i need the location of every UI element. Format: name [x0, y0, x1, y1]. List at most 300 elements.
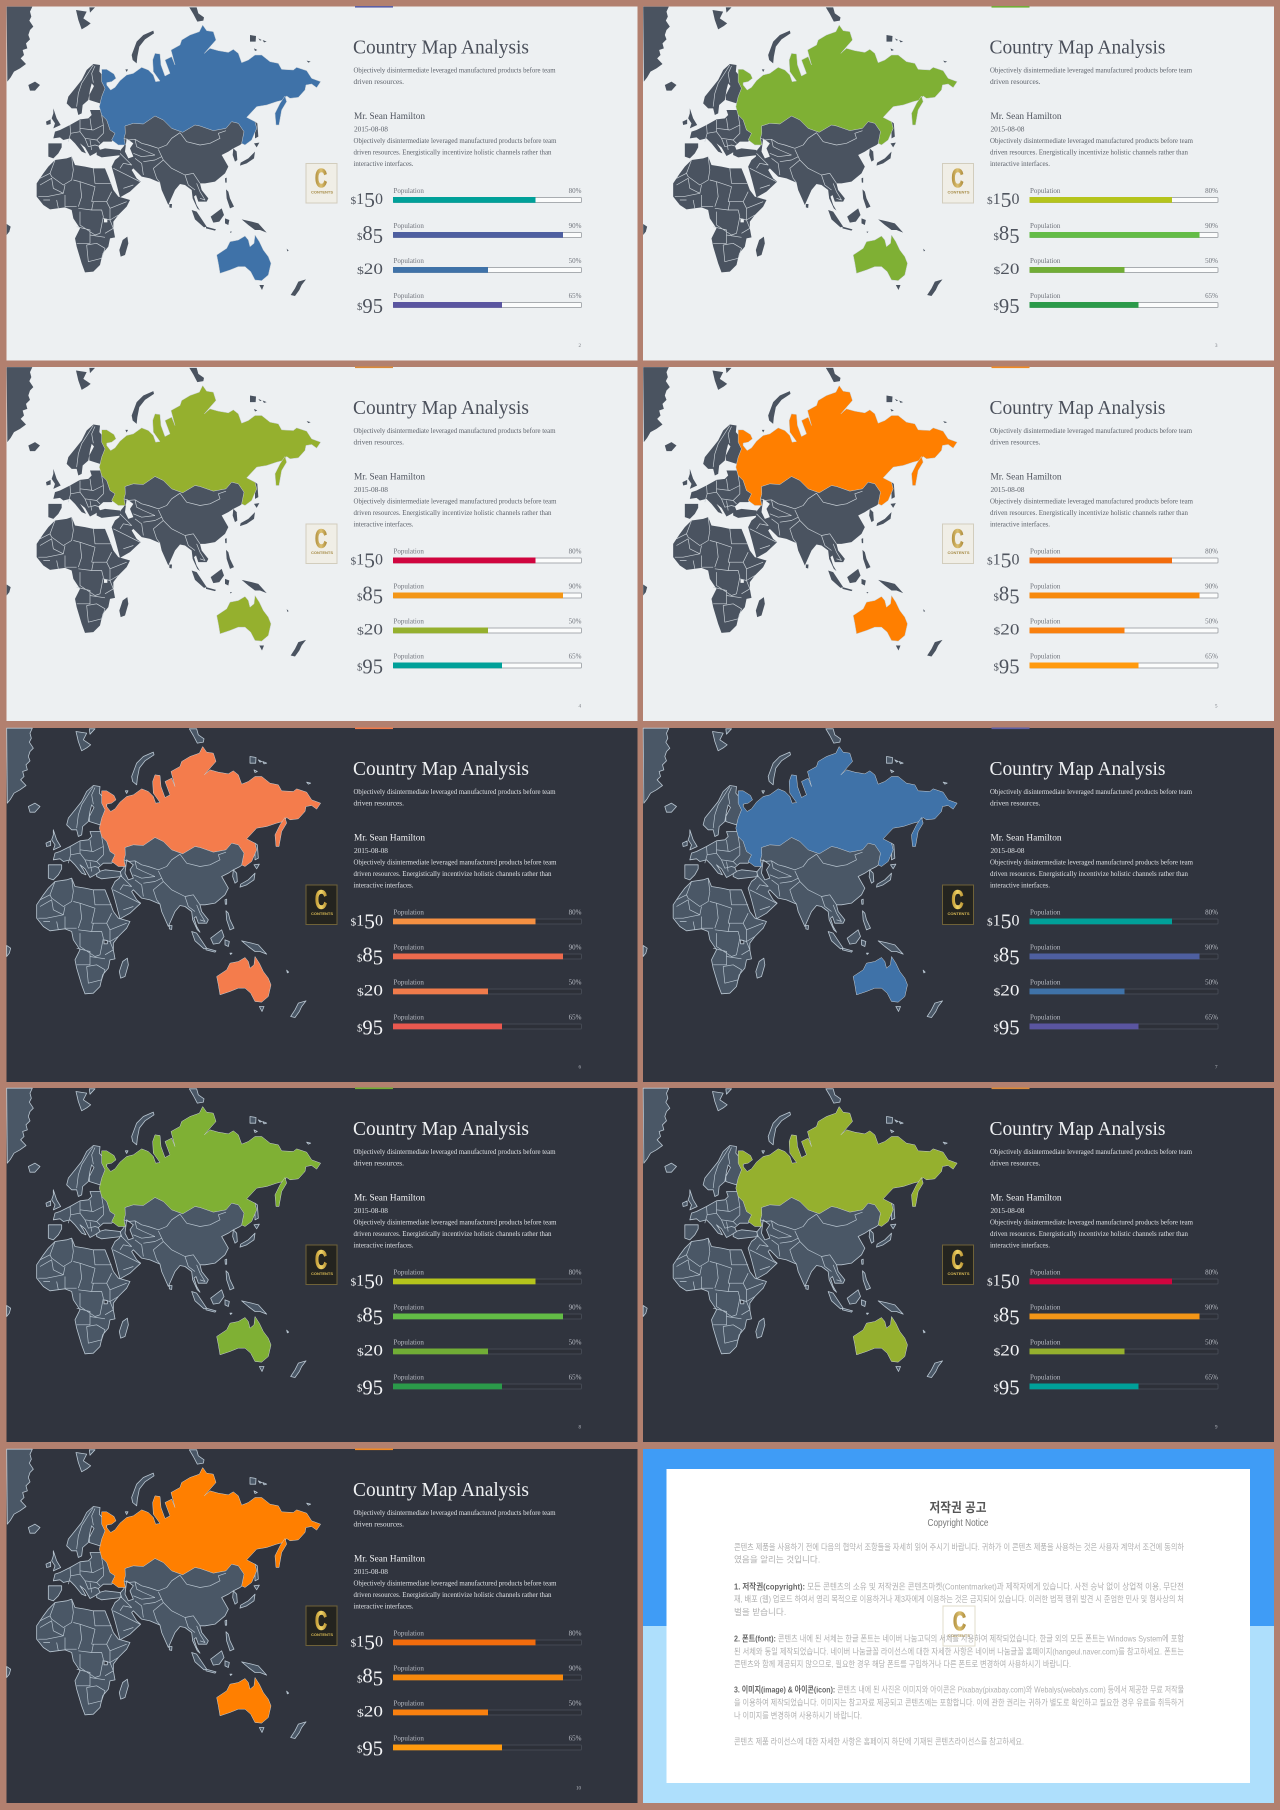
author block: Mr. Sean Hamilton [990, 472, 1062, 482]
stat row 2: $8 [357, 1664, 373, 1688]
author block: 2015-08-08 [354, 124, 388, 134]
logo [306, 1244, 337, 1284]
author block [990, 834, 1193, 890]
author block: interactive interfaces. [990, 880, 1050, 890]
logo: CONTENTS [948, 550, 970, 555]
logo [306, 524, 337, 564]
author block: Objectively disintermediate leveraged manufactured products before team [354, 1218, 557, 1226]
page number: 7 [1215, 1066, 1218, 1070]
copyright clause 2: 콘텐츠와 함께 제공되지 않으므로, 필요한 경우 해당 폰트를 구입하거나 다른 폰트로 변경하여 사용하시기 바랍니다. [734, 1658, 1071, 1669]
stat row 3 [994, 257, 1218, 278]
stat row 2: Population [1030, 1304, 1061, 1312]
author block: interactive interfaces. [354, 1240, 414, 1250]
author block: driven resources. Energistically incentivize holistic channels rather than [354, 1590, 552, 1599]
copyright clause 1: 1. 저작권(copyright): 모든 콘텐츠의 소유 및 저작권은 콘텐츠마켓(Contentmarket)과 제작자에게 있습니다. 사전 승낙 없이 상업적 이용, 무단전 [734, 1580, 1184, 1592]
stat row 3: $20 [994, 982, 1020, 1000]
map [7, 728, 321, 1017]
author block: Mr. Sean Hamilton [354, 1194, 425, 1204]
page number: 10 [576, 1786, 582, 1792]
stat row 4: 65% [1205, 1014, 1218, 1022]
stat row 4 [994, 1374, 1218, 1400]
stat row 4: Population [1030, 292, 1061, 300]
title: Country Map Analysis [353, 1479, 529, 1501]
map [643, 367, 957, 656]
logo [942, 884, 974, 924]
stat row 3 [357, 1338, 582, 1360]
stat row 4: 95 [362, 1016, 383, 1040]
stat row 1: 0 [375, 552, 383, 568]
stat row 3: $20 [357, 622, 383, 638]
stat row 2: 5 [1009, 584, 1020, 608]
stat row 2 [357, 582, 582, 608]
logo: C [315, 1606, 327, 1636]
stat row 4 [357, 1374, 582, 1400]
stat row 4 [357, 1014, 582, 1040]
intro text [990, 787, 1192, 808]
logo: CONTENTS [311, 911, 333, 916]
author block: interactive interfaces. [354, 880, 414, 890]
author block: driven resources. Energistically incentivize holistic channels rather than [990, 148, 1188, 156]
stat row 3: 50% [1205, 978, 1218, 986]
logo: CONTENTS [948, 190, 970, 194]
stat row 1: $1 [350, 1272, 364, 1290]
page number: 6 [578, 1066, 582, 1070]
stat row 2: $8 [994, 942, 1009, 966]
intro text: Objectively disintermediate leveraged manufactured products before team [354, 1147, 556, 1156]
author block: Objectively disintermediate leveraged manufactured products before team [354, 858, 557, 866]
stat row 4: 65% [569, 1014, 582, 1022]
stat row 4 [357, 292, 582, 318]
intro text: driven resources. [354, 77, 404, 86]
stat row 2: 5 [373, 1306, 383, 1330]
stat row 1: 5 [364, 188, 375, 212]
stat row 2: 5 [373, 584, 383, 608]
stat row 2: 5 [1009, 946, 1020, 970]
stat row 2: $8 [357, 1302, 373, 1326]
stat row 1: 80% [1205, 548, 1218, 556]
map [7, 1449, 321, 1738]
stat row 4 [994, 292, 1218, 318]
author block [354, 834, 557, 890]
copyright clause 1 [734, 1580, 1184, 1617]
stat row 3: $20 [357, 1342, 383, 1360]
stat row 4: 95 [362, 1376, 383, 1400]
logo: C [315, 163, 327, 193]
stat row 4: $ [994, 662, 999, 674]
stat row 4: 65% [1205, 652, 1218, 660]
stat row 3 [357, 1700, 582, 1720]
stat row 1: 5 [364, 910, 375, 934]
stat row 2: 90% [1205, 1304, 1218, 1312]
stat row 3: Population [394, 257, 424, 265]
logo: C [952, 884, 964, 914]
logo: CONTENTS [311, 1632, 333, 1637]
stat row 4: 95 [362, 1736, 383, 1760]
stat row 1: Population [394, 1630, 424, 1638]
stat row 4: $ [357, 301, 363, 313]
stat row 1: Population [394, 908, 424, 916]
stat row 4: 95 [999, 654, 1020, 678]
intro text [354, 1147, 556, 1168]
author block: driven resources. Energistically incentivize holistic channels rather than [990, 1229, 1188, 1238]
logo: CONTENTS [311, 1271, 333, 1276]
stat row 2 [994, 942, 1218, 970]
intro text [354, 787, 556, 808]
author block [354, 1554, 557, 1610]
copyright intro: 였음을 알리는 것입니다. [734, 1554, 820, 1564]
stat row 2: Population [1030, 582, 1061, 590]
stat row 3: 50% [569, 257, 582, 265]
intro text [990, 1147, 1192, 1168]
author block: driven resources. Energistically incentivize holistic channels rather than [354, 148, 552, 156]
map [643, 7, 957, 296]
author block: Objectively disintermediate leveraged manufactured products before team [990, 496, 1193, 506]
stat row 2: $8 [994, 1302, 1009, 1326]
stat row 1: 80% [1205, 908, 1218, 916]
stat row 2: $8 [357, 221, 373, 245]
author block: driven resources. Energistically incentivize holistic channels rather than [354, 1229, 552, 1238]
stat row 3 [357, 257, 582, 278]
stat row 4: Population [394, 292, 424, 300]
author block: 2015-08-08 [990, 485, 1025, 494]
stat row 3: Population [394, 978, 424, 986]
panel: light slide, orange map [643, 366, 1274, 721]
stat row 2: Population [394, 1304, 424, 1312]
author block [354, 1194, 557, 1250]
stat row 1: 5 [364, 1270, 375, 1294]
page number: 8 [578, 1426, 582, 1430]
stat row 1: 80% [1205, 1268, 1218, 1276]
stat row 2: 5 [373, 224, 383, 248]
copyright clause 1: 재, 배포 (웹) 업로드 하여서 영리 목적으로 이용하거나 제3자에게 이용하는 것은 금지되어 있습니다. 이러한 법적 행위 발견 시 준엄한 민사 및 형사상의 처 [734, 1593, 1184, 1604]
stat row 4: $ [357, 662, 363, 674]
stat row 1: 0 [1012, 912, 1020, 930]
copyright intro [734, 1541, 1184, 1564]
stat row 1: 5 [1001, 548, 1012, 572]
stat row 1: 0 [1012, 552, 1020, 568]
author block: Objectively disintermediate leveraged manufactured products before team [354, 1578, 557, 1588]
stat row 4: $ [357, 1022, 363, 1034]
author block [354, 112, 557, 168]
logo: C [315, 884, 327, 914]
logo [942, 163, 974, 203]
stat row 2: Population [394, 222, 424, 230]
stat row 1: $1 [987, 912, 1000, 930]
map [7, 1088, 321, 1377]
stat row 1: 0 [375, 912, 383, 930]
stat row 3: $20 [357, 1704, 383, 1720]
panel: dark slide, olive map [643, 1088, 1274, 1442]
logo: C [952, 163, 964, 193]
stat row 2: 90% [1205, 582, 1218, 590]
stat row 4 [357, 652, 582, 678]
stat row 3 [994, 618, 1218, 638]
stat row 3: Population [394, 618, 424, 626]
stat row 3: Population [1030, 978, 1061, 986]
stat row 1: 80% [569, 1268, 582, 1276]
stat row 4: $ [994, 301, 999, 313]
author block: 2015-08-08 [354, 1567, 388, 1576]
logo [942, 524, 974, 564]
stat row 1: $1 [350, 552, 364, 568]
logo: C [315, 524, 327, 554]
copyright clause 3: 을 이용하여 제작되었습니다. 이미지는 참고자료 제공되고 콘텐츠에는 포함합니다. 이에 관한 권리는 귀하가 별도로 확인하고 필요한 경우 유료를 취득하거 [734, 1696, 1184, 1708]
intro text: driven resources. [990, 1158, 1041, 1168]
author block: Mr. Sean Hamilton [990, 834, 1062, 844]
copyright clause 2: 2. 폰트(font): 콘텐츠 내에 된 서체는 한글 폰트는 네이버 나눔고딕의 서체를 사용하여 제작되었습니다. 한글 외의 모든 폰트는 Windows System에 포함 [734, 1632, 1184, 1644]
stat row 3: $20 [357, 982, 383, 1000]
author block: Mr. Sean Hamilton [990, 1194, 1062, 1204]
author block: Mr. Sean Hamilton [354, 472, 425, 482]
panel: light slide, green map [643, 6, 1274, 360]
panel: copyright notice [643, 1449, 1274, 1803]
logo [306, 884, 337, 924]
author block: Mr. Sean Hamilton [354, 1554, 425, 1564]
stat row 1: 80% [569, 187, 582, 195]
stat row 3: Population [1030, 618, 1061, 626]
stat row 4: $ [994, 1022, 999, 1034]
intro text: Objectively disintermediate leveraged manufactured products before team [990, 787, 1192, 796]
title: Country Map Analysis [990, 758, 1166, 780]
stat row 3 [357, 978, 582, 1000]
stat row 3: $20 [994, 261, 1020, 278]
stat row 1: $1 [350, 912, 364, 930]
title: Country Map Analysis [353, 397, 529, 419]
stat row 2: $8 [357, 582, 373, 606]
stat row 4: 65% [569, 292, 582, 300]
author block: Mr. Sean Hamilton [354, 112, 425, 122]
stat row 2: 90% [569, 1664, 582, 1672]
panel: dark slide, blue map [643, 728, 1274, 1082]
stat row 1: 0 [1012, 1272, 1020, 1290]
map [643, 1088, 957, 1377]
author block [990, 472, 1193, 528]
author block: driven resources. Energistically incentivize holistic channels rather than [990, 508, 1188, 517]
stat row 3: 50% [1205, 257, 1218, 265]
stat row 1: 0 [1012, 191, 1020, 208]
intro text: Objectively disintermediate leveraged manufactured products before team [354, 66, 556, 74]
stat row 4: Population [1030, 1014, 1061, 1022]
stat row 2: 90% [1205, 944, 1218, 952]
copyright subheading: Copyright Notice [928, 1518, 989, 1529]
stat row 2: Population [1030, 222, 1061, 230]
author block: Mr. Sean Hamilton [354, 834, 425, 844]
logo: C [952, 1244, 964, 1274]
stat row 1: $1 [987, 191, 1000, 208]
stat row 1 [350, 187, 582, 212]
stat row 2: 90% [569, 582, 582, 590]
stat row 4 [994, 1014, 1218, 1040]
stat row 4 [357, 1734, 582, 1760]
intro text: driven resources. [354, 1158, 404, 1168]
stat row 1 [350, 908, 582, 934]
stat row 3: 50% [569, 1338, 582, 1346]
stat row 2: 5 [373, 946, 383, 970]
stat row 4: Population [1030, 652, 1061, 660]
page number: 9 [1215, 1426, 1218, 1430]
stat row 2: Population [394, 944, 424, 952]
stat row 3: Population [1030, 1338, 1061, 1346]
logo [306, 1606, 337, 1646]
stat row 3: Population [1030, 257, 1061, 265]
stat row 2 [994, 582, 1218, 608]
stat row 1 [987, 1268, 1218, 1294]
stat row 4: Population [394, 1374, 424, 1382]
stat row 2: $8 [357, 942, 373, 966]
intro text [354, 426, 556, 446]
logo [942, 1244, 974, 1284]
intro text: driven resources. [990, 798, 1041, 808]
stat row 4: $ [994, 1382, 999, 1394]
stat row 1: 5 [364, 548, 375, 572]
map [7, 367, 321, 656]
stat row 3 [357, 618, 582, 638]
stat row 3: 50% [569, 978, 582, 986]
copyright clause 3: 3. 이미지(image) & 아이콘(icon): 콘텐츠 내에 된 사진은 이미지와 아이콘은 Pixabay(pixabay.com)와 Webalys(webalys.com) 등에서 제공한 무료 저작물 [734, 1684, 1184, 1694]
copyright heading: 저작권 공고 [930, 1500, 987, 1515]
stat row 2: $8 [994, 221, 1009, 245]
author block: Objectively disintermediate leveraged manufactured products before team [990, 858, 1193, 866]
stat row 1: Population [1030, 1268, 1061, 1276]
stat row 1: 0 [375, 191, 383, 208]
stat row 1: $1 [350, 1634, 364, 1650]
stat row 1 [350, 548, 582, 572]
intro text: Objectively disintermediate leveraged manufactured products before team [354, 787, 556, 796]
stat row 4: 95 [999, 294, 1020, 318]
author block: 2015-08-08 [990, 1206, 1025, 1215]
stat row 1 [987, 548, 1218, 572]
stat row 1 [350, 1268, 582, 1294]
stat row 2 [357, 942, 582, 970]
map [7, 7, 321, 296]
stat row 2: Population [394, 582, 424, 590]
author block: interactive interfaces. [990, 1240, 1050, 1250]
copyright clause 2: 된 서체와 동일 제작되었습니다. 네이버 나눔글꼴 라이선스에 대한 자세한 사항은 네이버 나눔글꼴 홈페이지(hangeul.naver.com)를 참고하세요. 폰트는 [734, 1646, 1184, 1656]
stat row 2: 90% [1205, 222, 1218, 230]
author block: interactive interfaces. [990, 159, 1050, 168]
author block: 2015-08-08 [990, 124, 1025, 134]
stat row 1: 0 [375, 1272, 383, 1290]
stat row 1: $1 [350, 191, 364, 208]
stat row 4: Population [394, 1734, 424, 1742]
stat row 2: Population [394, 1664, 424, 1672]
intro text: driven resources. [354, 1520, 404, 1528]
page number: 4 [578, 704, 582, 710]
stat row 1: Population [394, 187, 424, 195]
logo: CONTENTS [311, 550, 333, 555]
stat row 3: $20 [994, 1342, 1020, 1360]
author block: driven resources. Energistically incentivize holistic channels rather than [354, 508, 552, 517]
stat row 4: $ [357, 1744, 363, 1756]
author block [990, 112, 1193, 168]
stat row 1: 0 [375, 1634, 383, 1650]
author block: Objectively disintermediate leveraged manufactured products before team [990, 136, 1193, 145]
stat row 1: Population [394, 1268, 424, 1276]
logo: CONTENTS [948, 1271, 970, 1276]
panel: light slide, blue map [6, 6, 638, 360]
stat row 2: 90% [569, 222, 582, 230]
stat row 1: $1 [987, 1272, 1000, 1290]
stat row 1: 5 [1001, 1270, 1012, 1294]
page number: 2 [578, 344, 582, 349]
copyright clause 1: 벌을 받습니다. [734, 1607, 786, 1617]
stat row 1: 5 [1001, 188, 1012, 212]
intro text [990, 426, 1192, 446]
stat row 3: 50% [1205, 1338, 1218, 1346]
stat row 4: 95 [999, 1016, 1020, 1040]
stat row 4: 65% [569, 652, 582, 660]
stat row 2: 90% [569, 944, 582, 952]
copyright intro: 콘텐츠 제품을 사용하기 전에 다음의 협약서 조항들을 자세히 읽어 주시기 바랍니다. 귀하가 이 콘텐츠 제품을 사용하는 것은 사용자 계약서 조건에 동의하 [734, 1541, 1184, 1552]
stat row 2: 5 [1009, 1306, 1020, 1330]
stat row 2: 90% [569, 1304, 582, 1312]
stat row 3: $20 [357, 261, 383, 278]
stat row 4: 65% [1205, 292, 1218, 300]
intro text: Objectively disintermediate leveraged manufactured products before team [354, 426, 556, 435]
stat row 1: Population [1030, 908, 1061, 916]
page number: 5 [1215, 704, 1218, 710]
copyright clause 3: 나 이미지를 변경하여 사용하시기 바랍니다. [734, 1710, 862, 1720]
stat row 1: 5 [364, 1630, 375, 1654]
intro text: Objectively disintermediate leveraged manufactured products before team [354, 1508, 556, 1517]
stat row 2: Population [1030, 944, 1061, 952]
stat row 4: 95 [999, 1376, 1020, 1400]
author block: Objectively disintermediate leveraged manufactured products before team [354, 136, 557, 145]
stat row 2: 5 [1009, 224, 1020, 248]
stat row 3 [994, 1338, 1218, 1360]
title: Country Map Analysis [990, 397, 1166, 419]
stat row 1 [350, 1630, 582, 1654]
stat row 3: Population [394, 1338, 424, 1346]
logo [306, 163, 337, 203]
logo: CONTENTS [948, 911, 970, 916]
intro text: Objectively disintermediate leveraged manufactured products before team [990, 66, 1192, 74]
stat row 3: $20 [994, 622, 1020, 638]
author block: driven resources. Energistically incentivize holistic channels rather than [354, 869, 552, 878]
stat row 2 [357, 221, 582, 248]
map [643, 728, 957, 1017]
copyright clause 3 [734, 1684, 1184, 1720]
intro text [354, 1508, 556, 1528]
intro text: driven resources. [354, 798, 404, 808]
stat row 2 [994, 1302, 1218, 1330]
stat row 2 [357, 1664, 582, 1690]
stat row 3: Population [394, 1700, 424, 1708]
author block: driven resources. Energistically incentivize holistic channels rather than [990, 869, 1188, 878]
stat row 2: $8 [994, 582, 1009, 606]
author block: Objectively disintermediate leveraged manufactured products before team [354, 496, 557, 506]
author block: interactive interfaces. [990, 520, 1050, 528]
author block: 2015-08-08 [354, 485, 388, 494]
author block: interactive interfaces. [354, 520, 414, 528]
author block: Objectively disintermediate leveraged manufactured products before team [990, 1218, 1193, 1226]
stat row 4: $ [357, 1382, 363, 1394]
logo: C [952, 524, 964, 554]
stat row 1: Population [394, 548, 424, 556]
stat row 4: 95 [362, 294, 383, 318]
author block [354, 472, 557, 528]
stat row 1: Population [1030, 187, 1061, 195]
panel: dark slide, orange map [6, 1448, 638, 1803]
stat row 3: 50% [1205, 618, 1218, 626]
stat row 3: 50% [569, 618, 582, 626]
intro text [990, 66, 1192, 86]
copyright logo: C [953, 1606, 966, 1636]
title: Country Map Analysis [990, 1118, 1166, 1140]
stat row 1 [987, 908, 1218, 934]
stat row 4: 95 [362, 654, 383, 678]
stat row 1: 5 [1001, 910, 1012, 934]
